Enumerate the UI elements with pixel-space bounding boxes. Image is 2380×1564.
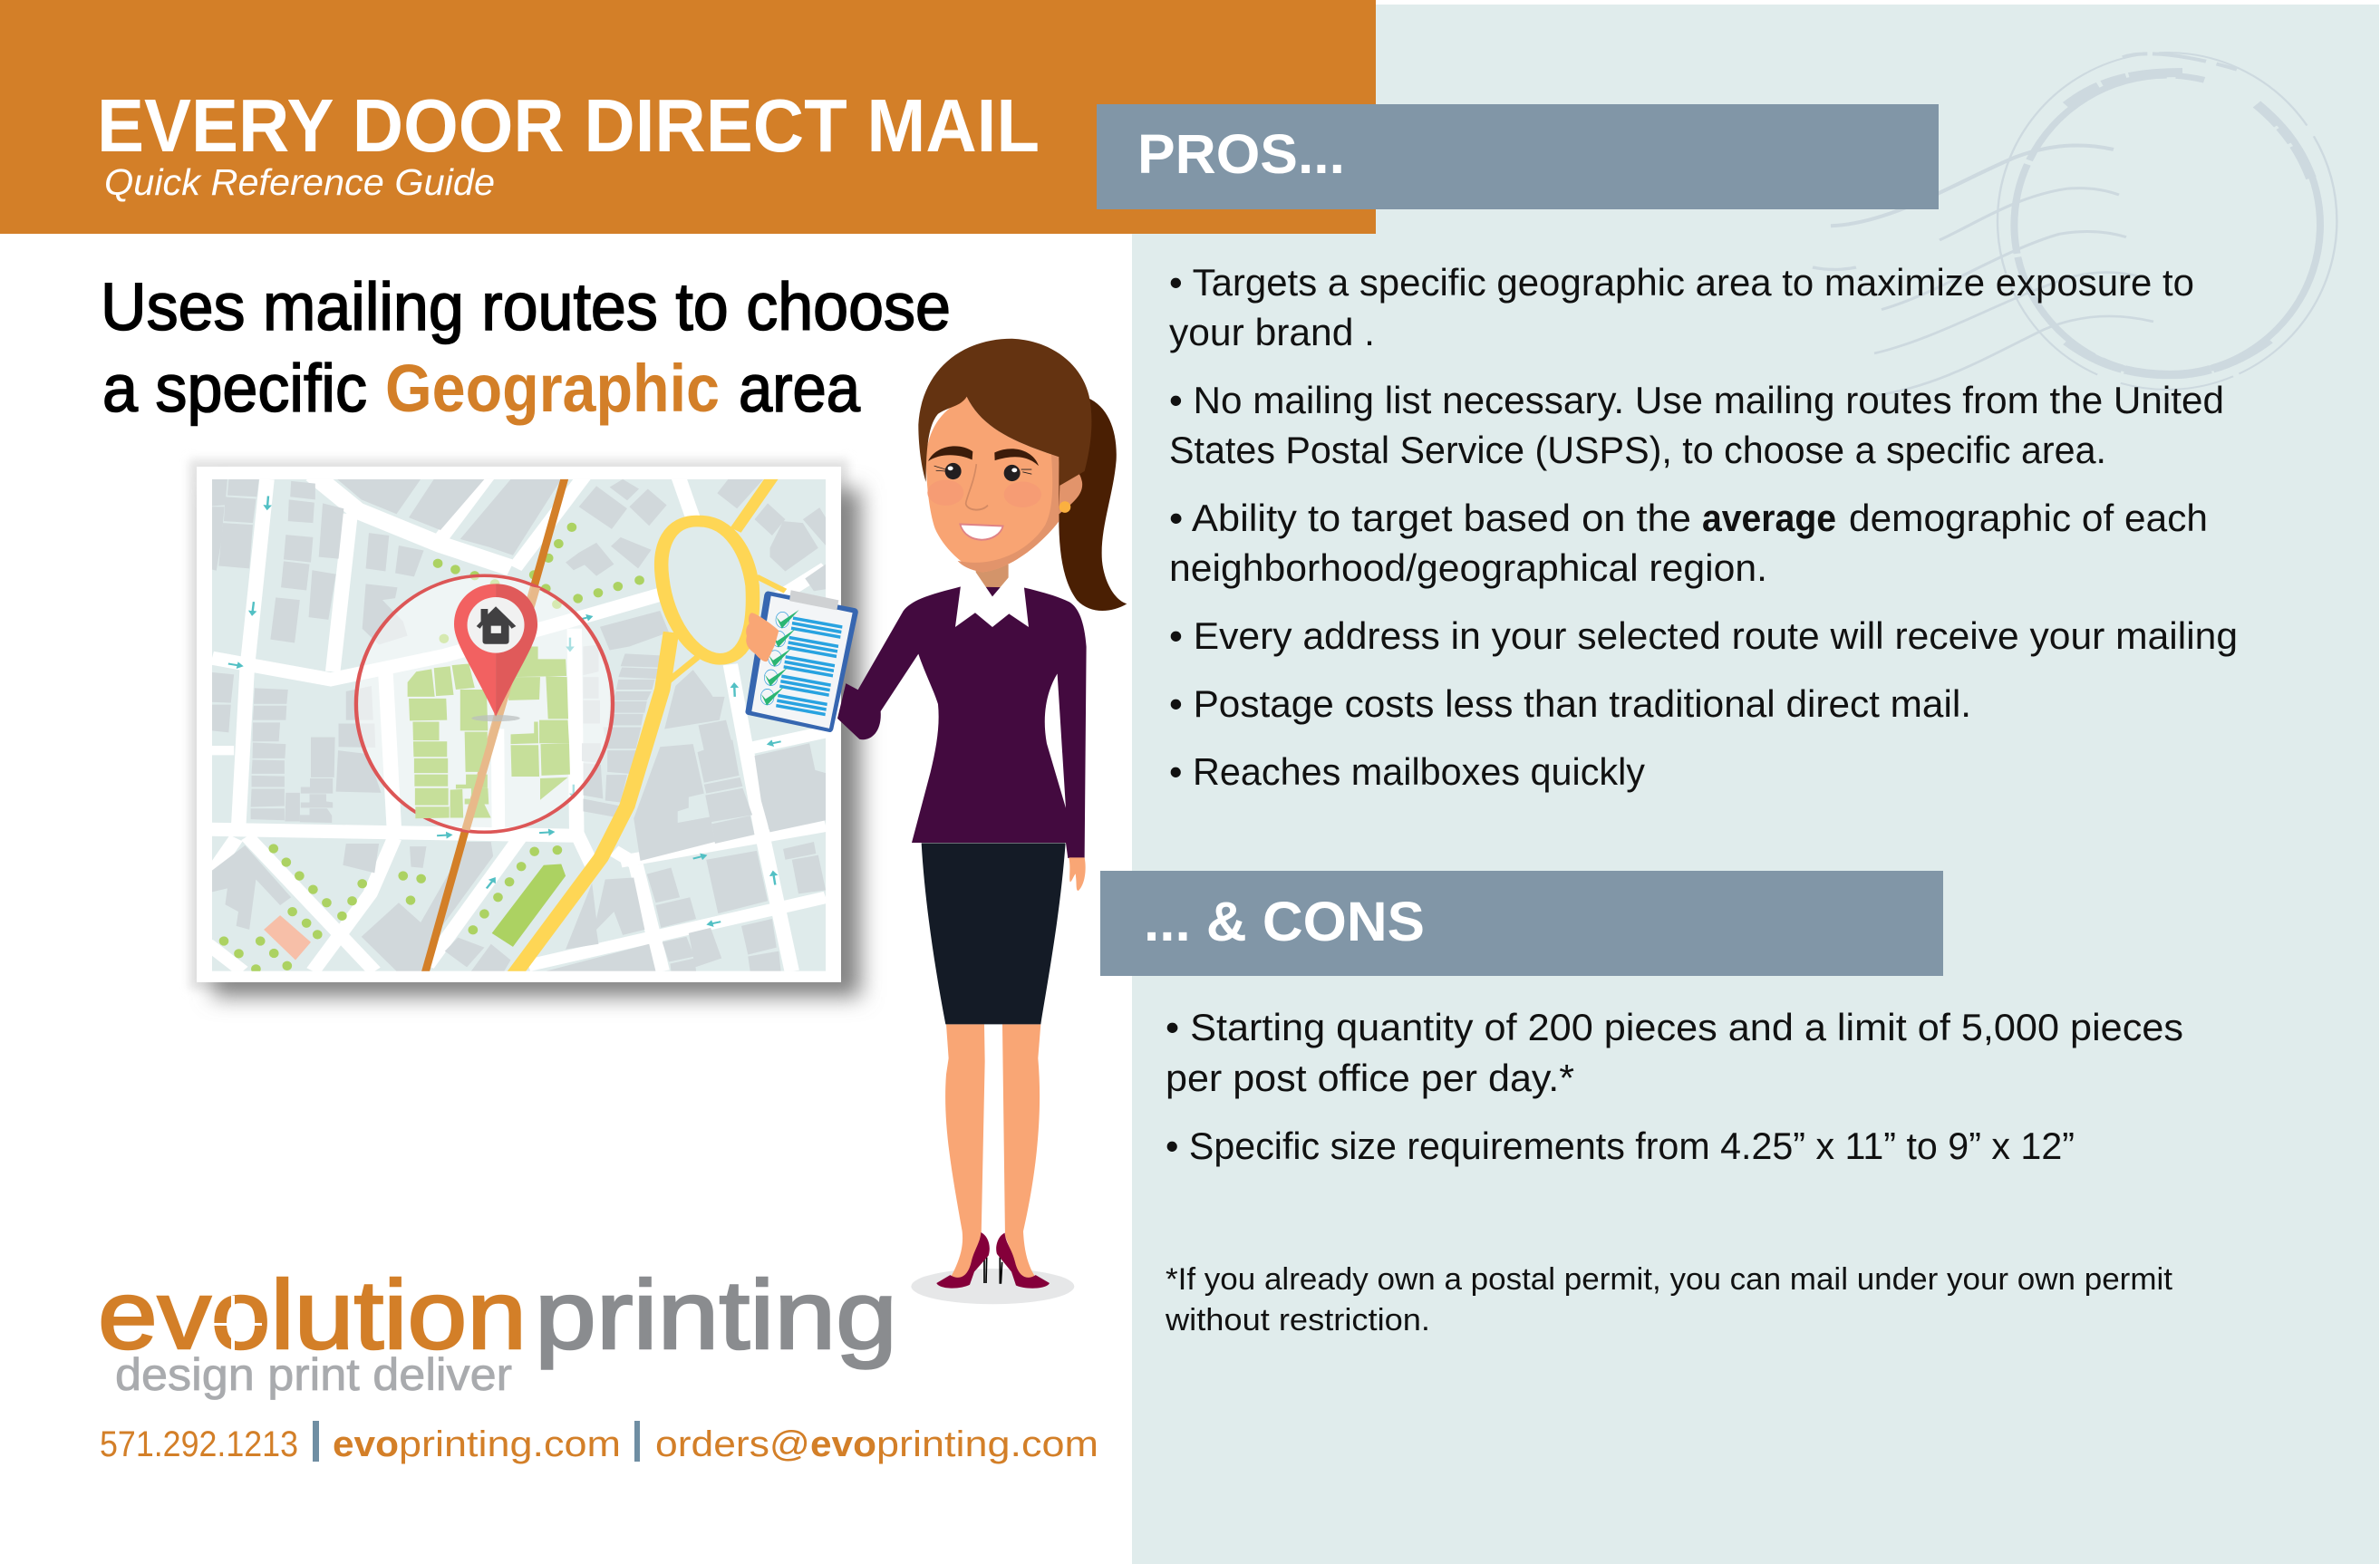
pros list: • Ability to target based on the xyxy=(1169,497,1691,539)
panel: pros header xyxy=(1097,104,1939,209)
map illustration xyxy=(208,475,826,976)
panel: pros header: PROS... xyxy=(1137,123,1345,185)
floor shadow xyxy=(911,1269,1074,1304)
sweater xyxy=(837,586,1087,858)
contact line: evo xyxy=(333,1424,399,1464)
map yellow road and roundabout xyxy=(513,475,785,976)
pros list: • Postage costs less than traditional direct mail. xyxy=(1169,682,1971,725)
cons list: • Specific size requirements from 4.25” x 11” to 9” x 12” xyxy=(1166,1125,2075,1167)
pros list: average xyxy=(1702,497,1836,539)
illustration: woman holding clipboard xyxy=(745,339,1127,1304)
legs xyxy=(945,1024,1040,1279)
map park xyxy=(492,864,566,947)
pros list: your brand . xyxy=(1169,311,1375,353)
hair xyxy=(918,339,1091,486)
pros list: • Targets a specific geographic area to maximize exposure to xyxy=(1169,261,2194,304)
logo tagline: design print deliver xyxy=(115,1349,512,1400)
map card shadow xyxy=(189,459,861,997)
contact line: printing.com xyxy=(399,1424,621,1464)
heading: geographic area: Geographic xyxy=(385,351,720,426)
heading: geographic area: a specific xyxy=(102,351,367,426)
footnote xyxy=(1165,1262,2173,1337)
heading: geographic area: Uses mailing routes to choose xyxy=(101,269,951,344)
eyes xyxy=(934,463,1031,481)
pros list xyxy=(1169,261,2238,793)
title: EVERY DOOR DIRECT MAIL xyxy=(97,83,1040,168)
nose xyxy=(966,464,988,510)
footnote: without restriction. xyxy=(1165,1303,1430,1337)
hand xyxy=(746,613,779,661)
header band xyxy=(0,0,1376,234)
icon: postmark stamp xyxy=(1813,53,2336,396)
clipboard lines xyxy=(776,618,842,714)
contact line: orders@ xyxy=(655,1424,810,1464)
eyebrows xyxy=(928,446,972,461)
subtitle: Quick Reference Guide xyxy=(104,161,495,203)
pros list: • No mailing list necessary. Use mailing routes from the United xyxy=(1169,379,2224,421)
map orange route xyxy=(424,475,566,976)
logo: evolution printing: evolution xyxy=(98,1260,527,1369)
logo: evolution printing xyxy=(98,1260,897,1400)
pros list: neighborhood/geographical region. xyxy=(1169,546,1767,589)
map trees xyxy=(219,523,644,974)
icon: location pin xyxy=(454,584,537,721)
panel: right background xyxy=(1132,5,2379,1564)
map roads xyxy=(208,475,826,971)
map street arrows xyxy=(228,496,781,924)
icon: house xyxy=(477,606,516,644)
left hand xyxy=(1069,857,1086,891)
green block in the selected area xyxy=(408,647,570,818)
cheeks xyxy=(927,480,963,506)
cons list xyxy=(1166,1006,2183,1167)
map card xyxy=(197,467,841,982)
ponytail xyxy=(1058,398,1127,611)
contact line xyxy=(100,1421,1098,1464)
earring xyxy=(1059,501,1070,513)
logo: evolution printing: printing xyxy=(535,1260,897,1369)
route through selected area xyxy=(466,587,537,830)
map selection circle xyxy=(356,575,613,832)
map sports court xyxy=(264,915,311,960)
pros list: States Postal Service (USPS), to choose a specific area. xyxy=(1169,429,2106,471)
face xyxy=(926,397,1059,573)
contact line: printing.com xyxy=(876,1424,1098,1464)
heading: geographic area xyxy=(101,269,951,426)
panel: cons header: ... & CONS xyxy=(1144,891,1425,952)
cons list: • Starting quantity of 200 pieces and a limit of 5,000 pieces xyxy=(1166,1006,2183,1048)
ear xyxy=(1059,469,1082,514)
shoes xyxy=(936,1232,1050,1289)
heading: geographic area: area xyxy=(739,351,861,426)
contact line: 571.292.1213 xyxy=(100,1424,298,1464)
collar xyxy=(955,573,1029,627)
woman lower body xyxy=(911,843,1086,1304)
clipboard xyxy=(745,590,858,732)
skirt xyxy=(922,843,1066,1024)
pros list: • Every address in your selected route will receive your mailing xyxy=(1169,614,2238,657)
cons list: per post office per day.* xyxy=(1166,1057,1574,1099)
mouth xyxy=(960,525,1003,540)
footnote: *If you already own a postal permit, you can mail under your own permit xyxy=(1166,1262,2173,1297)
map buildings xyxy=(212,479,826,971)
clipboard checkmarks xyxy=(760,610,799,706)
neck xyxy=(976,565,1009,596)
contact line: evo xyxy=(810,1424,876,1464)
pros list: demographic of each xyxy=(1849,497,2208,539)
panel: cons header xyxy=(1100,871,1943,976)
pros list: • Reaches mailboxes quickly xyxy=(1169,750,1645,793)
woman upper body and head xyxy=(745,339,1127,858)
